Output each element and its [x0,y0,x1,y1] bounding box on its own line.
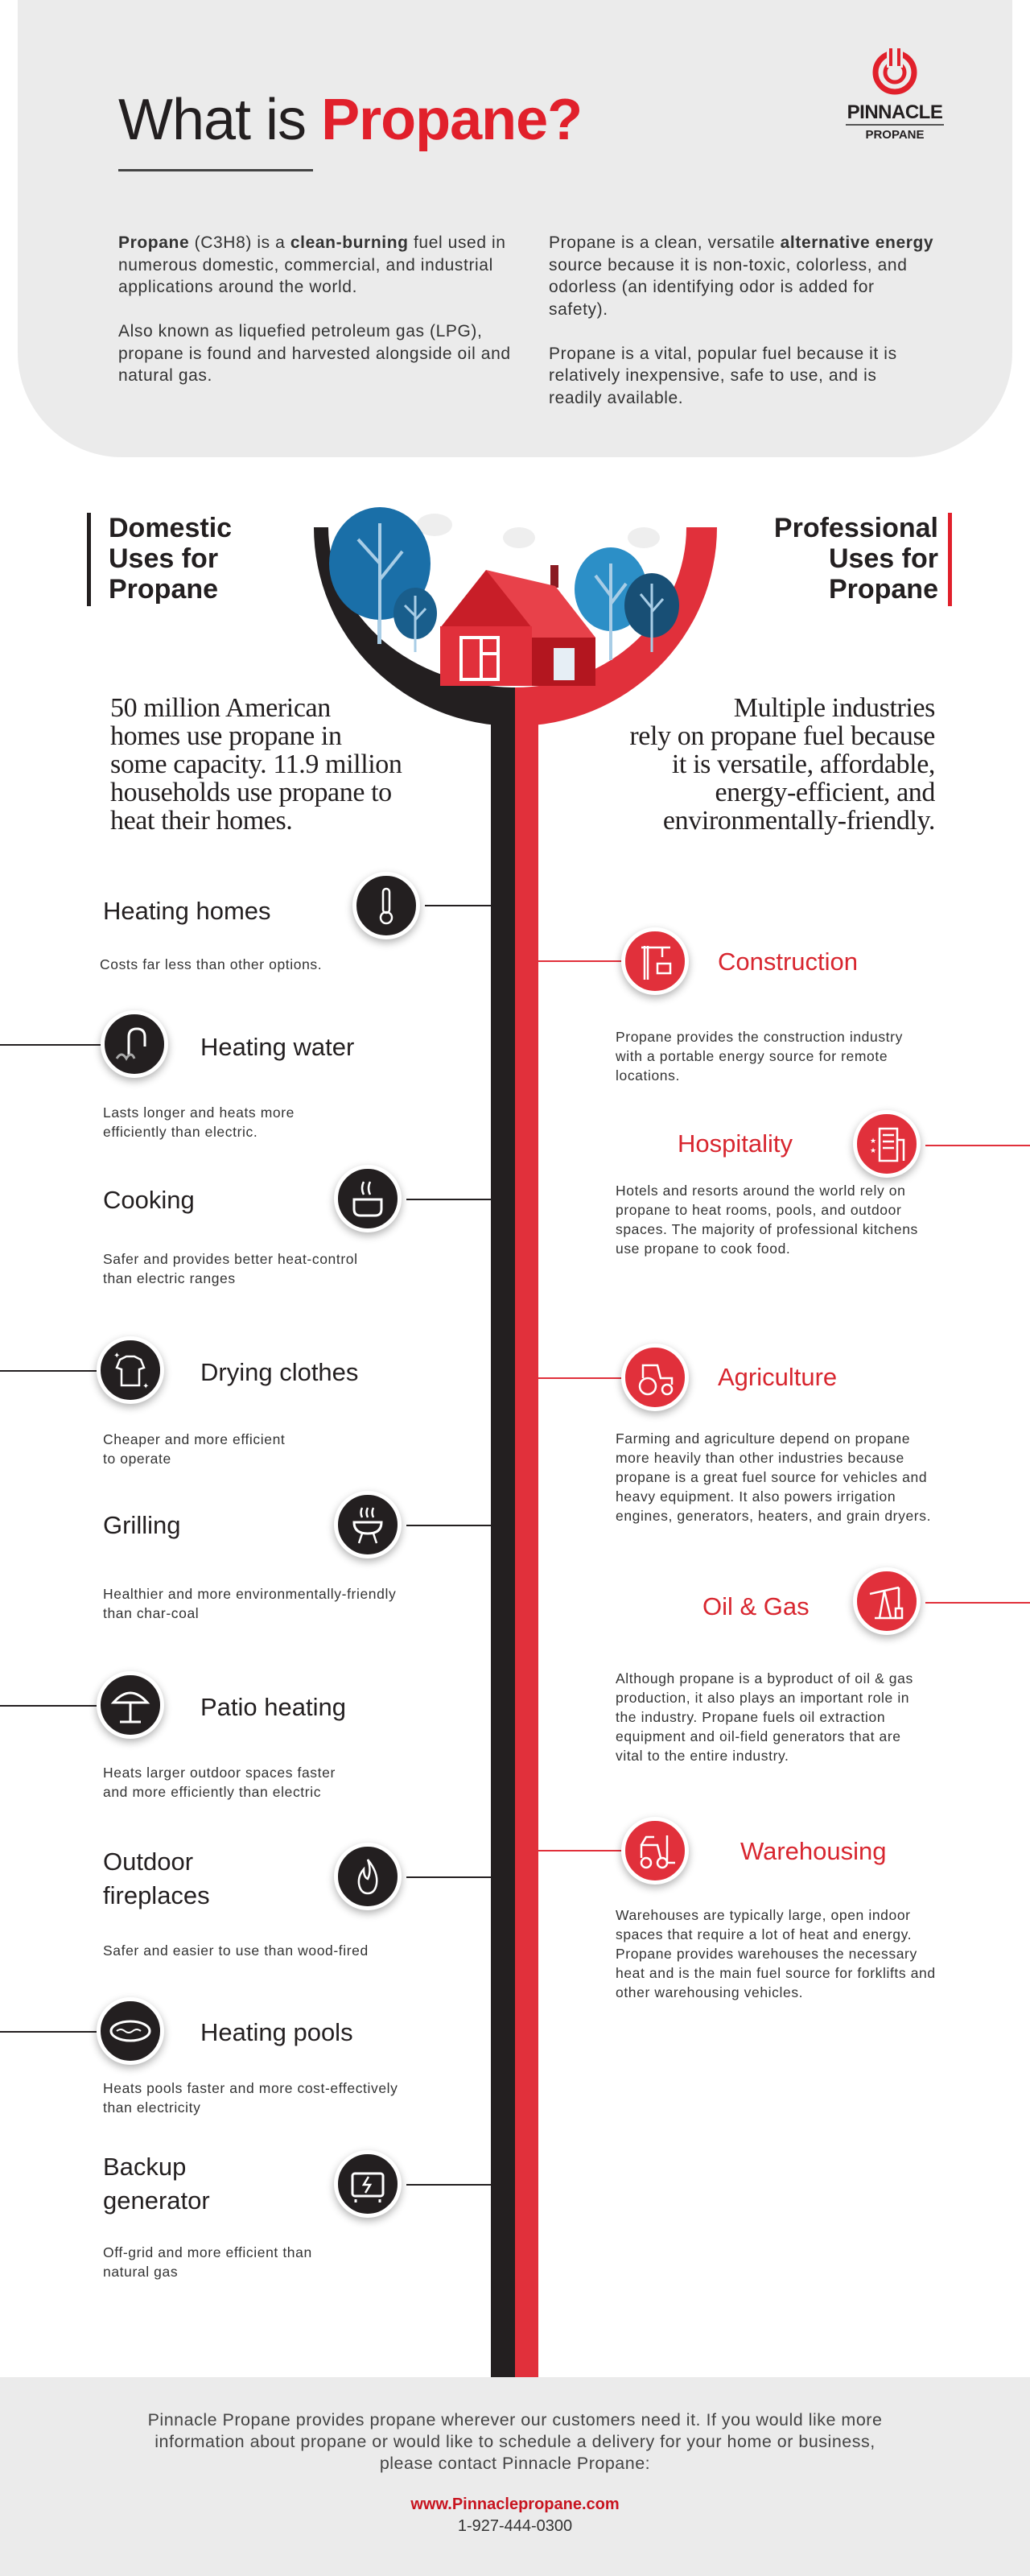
item: backup generator [103,2149,491,2280]
item: agriculture: engines, generators, heaters, and grain dryers. [616,1508,931,1524]
icon: flame [334,1843,402,1910]
item: warehousing: Warehouses are typically large, open indoor [616,1907,911,1923]
item: drying clothes: Cheaper and more efficient [103,1431,285,1447]
clouds [417,514,660,548]
item: agriculture: propane is a great fuel source for vehicles and [616,1469,927,1485]
item: construction: with a portable energy source for remote [616,1048,888,1064]
item: patio heating: Heats larger outdoor spaces faster [103,1765,336,1781]
item: agriculture: more heavily than other industries because [616,1450,904,1466]
item: hospitality: propane to heat rooms, pools, and outdoor [616,1202,901,1218]
footer text: Pinnacle Propane provides propane wherever our customers need it. If you would like more [148,2410,882,2429]
text: professional stat: it is versatile, affordable, [672,749,935,779]
item: hospitality: spaces. The majority of professional kitchens [616,1221,918,1237]
title: What is Propane? [118,88,582,152]
item: drying clothes [0,1335,358,1467]
intro right text [549,233,933,407]
icon: logo mark [872,48,917,95]
intro left text: natural gas. [118,366,212,385]
contact: 1-927-444-0300 [458,2517,572,2535]
item: outdoor fireplaces [103,1842,491,1959]
intro left text: propane is found and harvested alongside oil and [118,345,511,362]
trees [329,507,679,660]
text: domestic stat: 50 million American [110,693,331,723]
intro right text: safety). [549,299,608,319]
icon: shirt: ✦ [113,1352,120,1360]
text: professional stat: rely on propane fuel because [629,721,935,751]
heading: professional [774,513,952,606]
item: warehousing: heat and is the main fuel source for forklifts and [616,1965,936,1981]
item: cooking [103,1164,491,1286]
text: domestic stat: heat their homes. [110,806,292,836]
icon: shirt: ✦ [142,1382,149,1391]
item: warehousing: other warehousing vehicles. [616,1984,803,2000]
contact: www.Pinnaclepropane.com [410,2496,620,2513]
footer text: information about propane or would like to schedule a delivery for your home or business, [154,2432,876,2451]
item: oil & gas: Oil & Gas [702,1592,810,1620]
intro right text: relatively inexpensive, safe to use, and is [549,366,877,385]
intro right text: odorless (an identifying odor is added for [549,278,875,296]
item: construction: locations. [616,1067,680,1084]
item: warehousing: Propane provides warehouses the necessary [616,1946,917,1962]
text: domestic stat: some capacity. 11.9 million [110,749,402,779]
icon: pot [334,1165,402,1232]
intro left text [118,233,511,385]
text: domestic stat: homes use propane in [110,721,342,751]
icon: hotel: ★ [870,1137,876,1145]
item: heating water [0,1009,354,1140]
icon: tractor [621,1344,689,1411]
item: cooking: Cooking [103,1186,195,1214]
intro right text: Propane is a clean, versatile alternative energy [549,233,933,252]
item: heating water: Heating water [200,1033,354,1061]
text: professional stat [629,693,935,836]
item: agriculture [538,1343,931,1524]
text: professional stat: energy-efficient, and [715,778,935,807]
contact [410,2496,620,2535]
item: outdoor fireplaces: fireplaces [103,1881,210,1909]
stem [491,708,515,2377]
item: backup generator: natural gas [103,2264,178,2280]
item: backup generator: Off-grid and more efficient than [103,2244,312,2260]
bowl red half [515,527,717,726]
item: oil & gas [616,1567,1030,1764]
item: construction [538,926,903,1084]
item: oil & gas: vital to the entire industry. [616,1748,789,1764]
bowl black half [314,527,515,726]
item: warehousing: spaces that require a lot of heat and energy. [616,1926,912,1942]
title underline [118,169,313,171]
item: heating pools: Heating pools [200,2018,353,2046]
item: hospitality: Hotels and resorts around the world rely on [616,1183,905,1199]
footer text [148,2410,882,2473]
icon: pool [97,1997,164,2065]
icon: grill [334,1491,402,1558]
item: heating water: efficiently than electric. [103,1124,258,1140]
item: heating homes: Heating homes [103,897,271,925]
intro left text: numerous domestic, commercial, and industrial [118,256,493,274]
item: cooking: than electric ranges [103,1270,236,1286]
icon: oil pump [853,1567,921,1635]
item: construction: Propane provides the construction industry [616,1029,903,1045]
item: grilling [103,1489,491,1621]
icon: thermometer [352,872,420,939]
text: domestic stat [110,693,402,836]
heading: domestic: Domestic [109,513,232,543]
item: hospitality: use propane to cook food. [616,1241,790,1257]
item: heating pools [0,1996,398,2116]
heading: professional: Professional [774,513,938,543]
item: warehousing: Warehousing [740,1837,887,1865]
item: heating pools: Heats pools faster and more cost-effectively [103,2080,398,2096]
icon: hotel [853,1110,921,1178]
logo: PINNACLE [847,101,942,123]
item: oil & gas: equipment and oil-field generators that are [616,1728,901,1744]
item: backup generator: Backup [103,2153,186,2181]
item: heating homes: Costs far less than other options. [100,956,322,972]
item: outdoor fireplaces: Outdoor [103,1847,193,1876]
intro right text: readily available. [549,388,683,407]
item: patio heating [0,1670,346,1800]
item: agriculture: Agriculture [718,1363,837,1391]
item: grilling: than char-coal [103,1605,199,1621]
item: agriculture: heavy equipment. It also powers irrigation [616,1488,896,1505]
text: professional stat: environmentally-friendly. [663,806,935,836]
item: oil & gas: the industry. Propane fuels oil extraction [616,1709,885,1725]
icon: generator [334,2150,402,2218]
intro right text: Propane is a vital, popular fuel because it is [549,345,897,362]
item: drying clothes: Drying clothes [200,1358,358,1386]
heading: domestic: Propane [109,574,218,605]
logo: PROPANE [865,128,925,142]
intro left text: Also known as liquefied petroleum gas (LPG), [118,322,482,341]
heading: domestic [87,513,232,606]
item: outdoor fireplaces: Safer and easier to use than wood-fired [103,1942,369,1959]
item: agriculture: Farming and agriculture depend on propane [616,1430,910,1447]
item: grilling: Healthier and more environmentally-friendly [103,1586,396,1602]
item: patio heating: Patio heating [200,1693,346,1721]
item: grilling: Grilling [103,1511,180,1539]
intro left text: Propane (C3H8) is a clean-burning fuel used in [118,233,506,252]
intro left text: applications around the world. [118,278,357,296]
item: construction: Construction [718,947,858,976]
item: heating pools: than electricity [103,2099,200,2116]
item: oil & gas: Although propane is a byproduct of oil & gas [616,1670,913,1686]
icon: crane [621,927,689,995]
item: drying clothes: to operate [103,1451,171,1467]
intro right text: source because it is non-toxic, colorless, and [549,256,907,274]
logo [846,48,944,142]
header panel [18,0,1012,457]
icon: faucet [101,1010,168,1078]
item: warehousing [538,1816,936,2000]
heading: professional: Propane [829,574,938,605]
item: heating homes [100,871,491,972]
icon: forklift [621,1817,689,1885]
item: cooking: Safer and provides better heat-control [103,1251,358,1267]
item: heating water: Lasts longer and heats more [103,1104,295,1121]
icon: hotel: ★ [870,1146,876,1154]
heading: domestic: Uses for [109,543,218,574]
text: domestic stat: households use propane to [110,778,392,807]
footer text: please contact Pinnacle Propane: [380,2454,650,2473]
text: professional stat: Multiple industries [734,693,935,723]
icon: shirt [97,1336,164,1404]
item: hospitality [616,1109,1030,1257]
item: backup generator: generator [103,2186,210,2215]
item: hospitality: Hospitality [678,1129,793,1158]
item: oil & gas: production, it also plays an important role in [616,1690,909,1706]
item: patio heating: and more efficiently than electric [103,1784,321,1800]
bowl illustration [314,507,717,2377]
icon: patio umbrella [97,1671,164,1739]
heading: professional: Uses for [829,543,938,574]
footer [0,2377,1030,2576]
house [440,565,595,686]
